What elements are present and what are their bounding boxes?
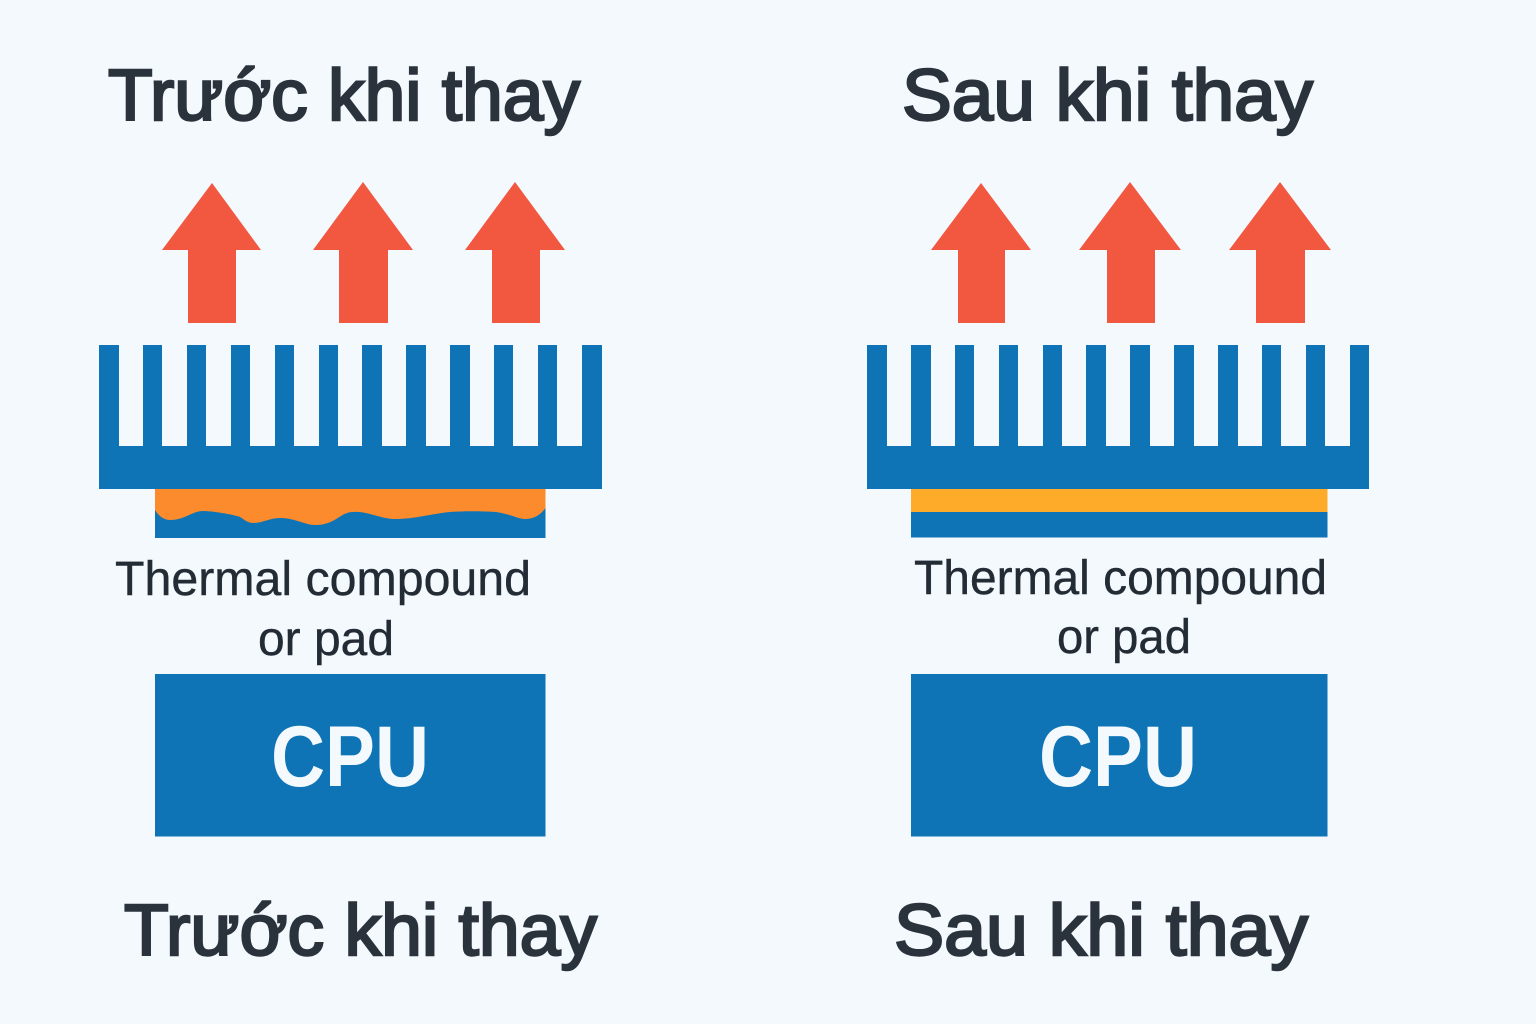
heading: before (top): Trước khi thay — [108, 56, 580, 136]
panel: after replacement — [867, 56, 1369, 971]
caption: after (bottom): Sau khi thay — [894, 891, 1308, 971]
CPU block (after) — [911, 674, 1328, 836]
panel: before replacement — [99, 56, 602, 971]
icon: heat arrows (after) — [931, 182, 1331, 323]
heading: after (top): Sau khi thay — [902, 56, 1313, 136]
CPU block (before): CPU — [271, 709, 429, 805]
CPU block (before) — [155, 674, 546, 836]
heatsink (after) — [867, 345, 1369, 489]
even thermal compound (after) — [911, 489, 1328, 512]
label: thermal compound (before): or pad — [258, 613, 394, 666]
icon: heat arrows (before) — [162, 182, 565, 323]
label: thermal compound (before): Thermal compound — [115, 553, 531, 606]
heatsink (before) — [99, 345, 602, 489]
label: thermal compound (after): or pad — [1057, 611, 1191, 664]
CPU block (after): CPU — [1039, 709, 1197, 805]
label: thermal compound (after): Thermal compound — [914, 552, 1327, 605]
heat spreader plate (before) — [155, 489, 546, 538]
heat spreader plate (after) — [911, 489, 1328, 538]
caption: before (bottom): Trước khi thay — [124, 891, 597, 971]
uneven thermal compound (before) — [155, 489, 546, 525]
